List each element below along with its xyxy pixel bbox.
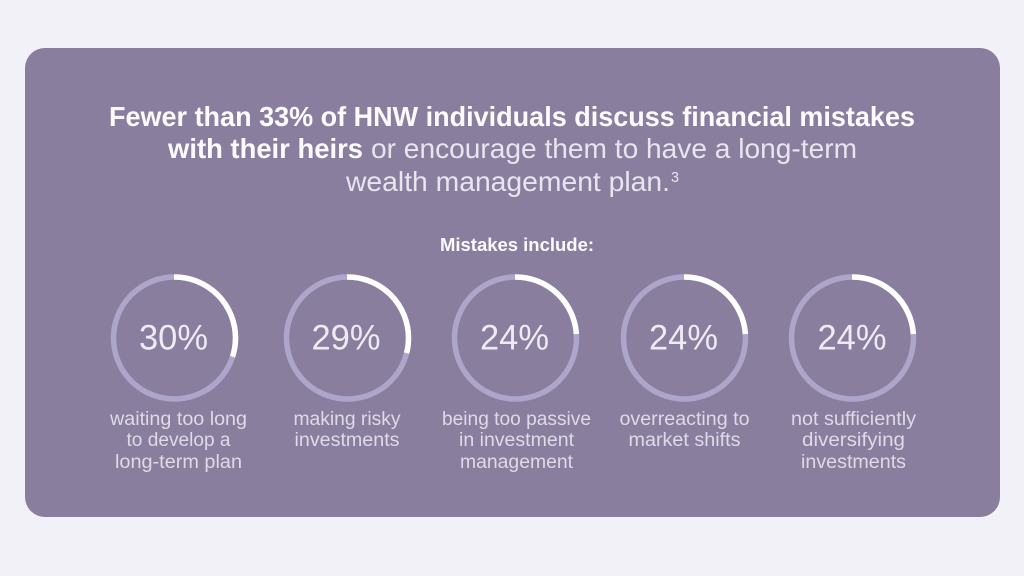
stat: 30% waiting too long: long-term plan bbox=[115, 452, 242, 473]
stat: 30% waiting too long: to develop a bbox=[126, 430, 231, 451]
stat: 24% being too passive: being too passive bbox=[442, 409, 591, 430]
stat: 24% not sufficiently diversifying: investments bbox=[801, 452, 906, 473]
panel: main purple card bbox=[25, 48, 1000, 517]
stat: 24% overreacting: market shifts bbox=[628, 430, 740, 451]
stat: 24% overreacting: 24% bbox=[649, 318, 718, 358]
stat: 30% waiting too long: 30% bbox=[139, 318, 208, 358]
stat: 29% making risky investments: investments bbox=[294, 430, 400, 451]
heading: 3 bbox=[671, 170, 679, 186]
subheading: mistakes include: Mistakes include: bbox=[440, 235, 594, 255]
stat: 29% making risky investments: 29% bbox=[312, 318, 380, 358]
heading bbox=[109, 101, 915, 197]
stat: 30% waiting too long bbox=[109, 277, 247, 473]
stat: 24% being too passive: 24% bbox=[480, 318, 549, 358]
stat: 24% not sufficiently diversifying: diversifying bbox=[802, 430, 905, 451]
stat: 24% not sufficiently diversifying: 24% bbox=[818, 318, 886, 358]
stat: 24% being too passive bbox=[442, 277, 591, 473]
heading: wealth management plan. bbox=[345, 166, 670, 197]
stat: 24% overreacting bbox=[620, 277, 750, 451]
stat: 24% being too passive: in investment bbox=[459, 430, 575, 451]
stat: 24% being too passive: management bbox=[460, 452, 574, 473]
stat: 24% not sufficiently diversifying bbox=[791, 277, 917, 473]
stat: 30% waiting too long: waiting too long bbox=[109, 409, 247, 430]
stat: 29% making risky investments: making risky bbox=[294, 409, 401, 430]
stat: 24% not sufficiently diversifying: not sufficiently bbox=[791, 409, 917, 430]
heading: or encourage them to have a long-term bbox=[371, 133, 857, 164]
stat: 29% making risky investments bbox=[286, 277, 408, 451]
heading: with their heirs bbox=[167, 133, 363, 164]
heading: Fewer than 33% of HNW individuals discuss financial mistakes bbox=[109, 101, 915, 132]
stat: 24% overreacting: overreacting to bbox=[620, 409, 750, 430]
